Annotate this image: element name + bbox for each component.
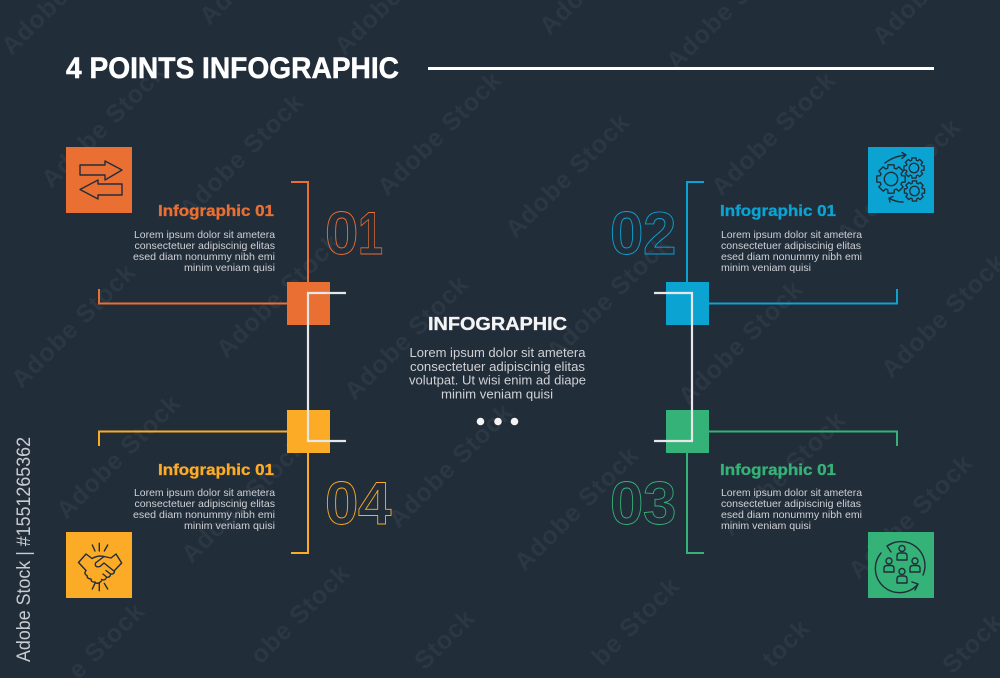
heading 01: Infographic 01 [158, 203, 274, 220]
body 04: esed diam nonummy nibh emi [133, 509, 275, 521]
icon: arrows [66, 147, 132, 213]
text: Adobe Stock [509, 441, 645, 577]
text: Adobe Stock [541, 230, 677, 366]
text: Adobe Stock [372, 66, 508, 202]
text: Adobe Stock [176, 433, 312, 569]
panel: point 01 [66, 147, 383, 325]
connector lines 01 [99, 182, 308, 304]
body 01 [133, 229, 275, 274]
body 02: minim veniam quisi [721, 262, 811, 274]
body 01: minim veniam quisi [184, 262, 275, 274]
three dots [477, 418, 518, 425]
body 03: minim veniam quisi [721, 520, 811, 532]
number 01: 0 [325, 200, 358, 267]
number 01: 1 [358, 200, 383, 267]
number 03 [610, 470, 676, 537]
number 04 [325, 470, 392, 537]
center body [409, 346, 586, 402]
text: Adobe Stock [706, 66, 842, 202]
body 04: minim veniam quisi [184, 520, 275, 532]
text: Adobe Stock [831, 113, 967, 249]
stock id label: Adobe Stock | #1551265362 [14, 437, 35, 662]
text: Adobe Stock [174, 88, 310, 224]
number 01 [325, 200, 383, 267]
text: Stock [409, 604, 481, 675]
body 01: consectetuer adipiscinig elitas [134, 240, 275, 252]
marker square 02 [666, 282, 709, 325]
center body: volutpat. Ut wisi enim ad diape [409, 374, 586, 388]
body 03 [721, 487, 862, 532]
body 02: esed diam nonummy nibh emi [721, 251, 862, 263]
body 02: Lorem ipsum dolor sit ametera [721, 229, 862, 241]
text: Adobe Stock [6, 258, 142, 394]
body 02 [721, 229, 862, 274]
number 02 [610, 200, 676, 267]
panel: point 03 [610, 410, 934, 598]
text: Adobe Stock [211, 228, 347, 364]
center heading: INFOGRAPHIC [428, 313, 567, 334]
body 01: Lorem ipsum dolor sit ametera [134, 229, 275, 241]
text: Adobe Stock [36, 58, 172, 194]
icon: handshake [66, 532, 132, 598]
center body: minim veniam quisi [441, 388, 553, 402]
title: 4 POINTS INFOGRAPHIC [66, 52, 399, 85]
title rule [428, 67, 934, 70]
center body: Lorem ipsum dolor sit ametera [410, 346, 586, 360]
number 03: 3 [643, 470, 676, 537]
icon: team cycle [868, 532, 934, 598]
body 03: Lorem ipsum dolor sit ametera [721, 487, 862, 499]
text: be Stock [586, 572, 686, 671]
right white bracket [654, 293, 692, 441]
body 04: consectetuer adipiscinig elitas [134, 498, 275, 510]
icon: gears [868, 147, 934, 213]
marker square 03 [666, 410, 709, 453]
text: Adobe Stock [339, 270, 475, 406]
panel: point 04 [66, 410, 392, 598]
number 04: 0 [325, 470, 358, 537]
number 02: 0 [610, 200, 643, 267]
body 03: esed diam nonummy nibh emi [721, 509, 862, 521]
center body: consectetuer adipiscinig elitas [410, 360, 585, 374]
connector lines 04 [99, 432, 308, 553]
number 04: 4 [358, 470, 392, 537]
body 04 [133, 487, 275, 532]
marker square 04 [287, 410, 330, 453]
body 04: Lorem ipsum dolor sit ametera [134, 487, 275, 499]
left white bracket [308, 293, 346, 441]
text: Adobe Stock [843, 449, 979, 585]
body 03: consectetuer adipiscinig elitas [721, 498, 861, 510]
connector lines 03 [687, 432, 897, 553]
marker square 01 [287, 282, 330, 325]
text: Adobe Stock [673, 275, 809, 411]
body 01: esed diam nonummy nibh emi [133, 251, 275, 263]
text: Adobe Stock [383, 398, 519, 534]
panel: point 02 [610, 147, 934, 325]
text: Adobe Stock [500, 108, 636, 244]
heading 04: Infographic 01 [158, 462, 274, 479]
body 02: consectetuer adipiscinig elitas [721, 240, 861, 252]
number 03: 0 [610, 470, 643, 537]
connector lines 02 [687, 182, 897, 304]
text: tock [757, 614, 816, 673]
center panel [409, 313, 586, 425]
heading 03: Infographic 01 [720, 462, 836, 479]
text: Adobe Stock [51, 389, 187, 525]
text: obe Stock [245, 559, 356, 669]
text: Adobe Stock [716, 406, 852, 542]
number 02: 2 [643, 200, 676, 267]
heading 02: Infographic 01 [720, 203, 836, 220]
